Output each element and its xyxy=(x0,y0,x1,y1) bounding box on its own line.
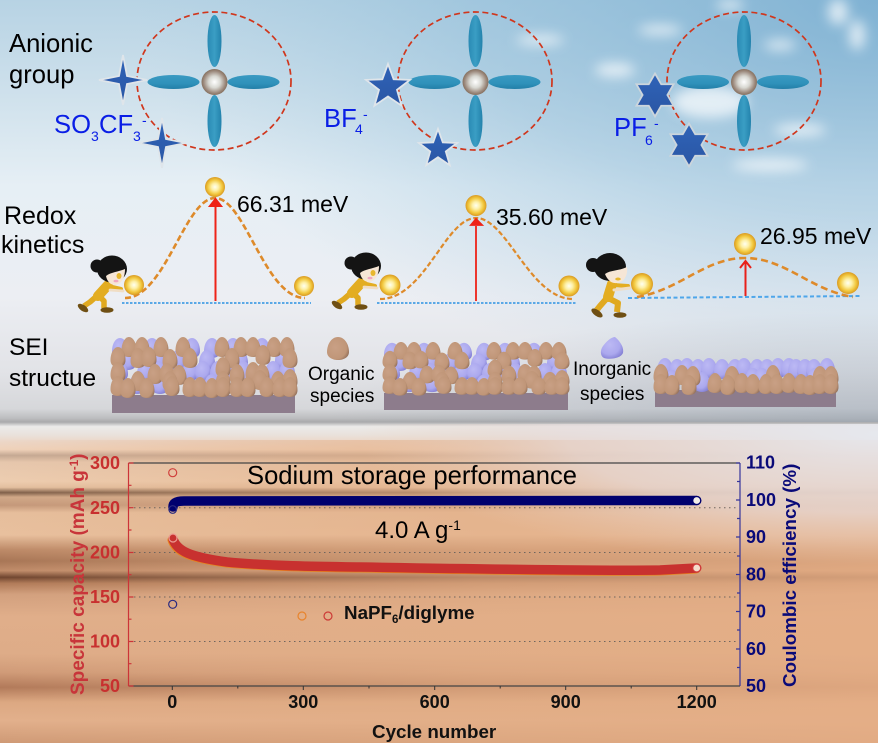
row label: Anionic group: group xyxy=(9,61,74,89)
icon: five-point star xyxy=(419,129,457,165)
solvation shell circle xyxy=(137,12,291,150)
legend: organic species xyxy=(308,337,375,407)
baseline xyxy=(628,296,862,298)
icon: four-point star xyxy=(138,118,186,168)
right axis tick labels: 60 xyxy=(746,639,766,659)
label: BF4: - xyxy=(363,106,368,122)
label: SO3CF3: SO xyxy=(54,111,91,139)
value label: 35.60 meV xyxy=(496,204,608,230)
left axis title: Specific capacity (mAh g xyxy=(68,470,89,695)
SEI layer 2 xyxy=(382,342,570,410)
left axis xyxy=(128,463,134,686)
legend: inorganic species: species xyxy=(580,384,644,405)
series: coulombic efficiency xyxy=(169,496,701,608)
right axis tick labels: 90 xyxy=(746,527,766,547)
legend: electrolyte: 6 xyxy=(392,614,398,626)
row label: Redox kinetics: Redox xyxy=(4,202,77,230)
chart title: Sodium storage performance xyxy=(247,462,577,490)
panel: BF4 anion xyxy=(324,12,552,165)
icon: six-point star xyxy=(670,124,708,166)
label: BF4: 4 xyxy=(355,121,363,137)
icon: left ball xyxy=(380,274,400,296)
right axis xyxy=(736,463,740,686)
left axis tick labels: 150 xyxy=(90,587,120,607)
icon: right ball xyxy=(294,276,314,296)
energy barrier 2 xyxy=(330,195,608,311)
series: capacity xyxy=(169,469,701,572)
legend: organic species: species xyxy=(310,386,374,407)
arrow: barrier height xyxy=(471,219,482,301)
legend: organic species: Organic xyxy=(308,364,375,385)
x axis ticks xyxy=(172,686,697,690)
right axis tick labels: 110 xyxy=(746,452,775,472)
SEI layer 3 xyxy=(654,358,838,407)
right axis tick labels: 100 xyxy=(746,490,776,510)
row label: SEI structure: SEI xyxy=(9,334,48,361)
energy barrier 1 xyxy=(76,177,349,314)
row label: SEI structure: structue xyxy=(9,365,96,392)
panel: PF6 anion xyxy=(614,12,821,166)
icon: top ball xyxy=(205,177,225,197)
x axis tick labels xyxy=(167,692,717,712)
left axis title: -1 xyxy=(69,459,81,470)
icon: right ball xyxy=(837,272,859,294)
icon: five-point star xyxy=(366,64,410,106)
icon: left ball xyxy=(124,275,144,295)
icon: left ball xyxy=(631,273,653,295)
label: PF6: PF xyxy=(614,114,647,142)
SEI layer 1 xyxy=(110,337,298,413)
solvation shell circle xyxy=(667,12,821,150)
label: SO3CF3: 3 xyxy=(133,128,141,144)
right axis tick labels: 70 xyxy=(746,602,766,622)
left axis tick labels xyxy=(90,453,120,696)
right axis title: Coulombic efficiency (%) xyxy=(779,464,800,687)
x axis tick labels: 900 xyxy=(551,692,581,712)
x axis tick labels: 600 xyxy=(420,692,450,712)
arrow: barrier height xyxy=(210,199,221,301)
x axis tick labels: 1200 xyxy=(677,692,717,712)
chart: sodium storage performance xyxy=(68,452,800,742)
left axis tick labels: 300 xyxy=(90,453,120,473)
sodium ion with solvent petals xyxy=(148,15,280,147)
top and bottom spines xyxy=(128,463,740,686)
barrier curve xyxy=(637,258,853,297)
label: PF6: 6 xyxy=(645,132,653,148)
icon: six-point star xyxy=(636,74,674,116)
value label: 26.95 meV xyxy=(760,223,872,249)
label: SO3CF3: CF xyxy=(99,111,133,139)
panel: SO3CF3 anion xyxy=(54,12,291,168)
label: BF4: BF xyxy=(324,105,357,133)
value label: 66.31 meV xyxy=(237,191,349,217)
icon: four-point star xyxy=(99,55,147,105)
legend: inorganic species: Inorganic xyxy=(573,359,651,380)
x axis title: Cycle number xyxy=(372,721,497,742)
icon: girl pushing ball xyxy=(330,252,381,311)
icon: top ball xyxy=(466,195,486,216)
solvation shell circle xyxy=(398,12,552,150)
label: PF6: - xyxy=(654,115,659,131)
legend: inorganic species xyxy=(573,337,651,405)
left axis tick labels: 200 xyxy=(90,542,120,562)
x axis tick labels: 0 xyxy=(167,692,177,712)
left axis tick labels: 100 xyxy=(90,632,120,652)
label: SO3CF3: - xyxy=(142,112,147,128)
row label: Anionic group: Anionic xyxy=(9,30,93,58)
right axis tick labels xyxy=(746,452,776,696)
right axis tick labels: 50 xyxy=(746,676,766,696)
current density label: -1 xyxy=(448,517,461,533)
baseline xyxy=(122,302,311,304)
energy barrier 3 xyxy=(586,223,872,319)
barrier curve xyxy=(125,198,305,298)
grid lines xyxy=(129,508,738,642)
icon: girl pushing ball xyxy=(586,253,630,319)
current density label: 4.0 A g xyxy=(375,517,448,544)
arrow: barrier height xyxy=(740,261,751,296)
label: SO3CF3: 3 xyxy=(91,128,99,144)
left axis title: ) xyxy=(68,454,89,460)
legend: electrolyte xyxy=(298,602,475,626)
legend: electrolyte: /diglyme xyxy=(398,602,475,623)
icon: top ball xyxy=(734,233,756,255)
icon: girl pushing ball xyxy=(76,256,127,314)
legend: electrolyte: NaPF xyxy=(344,602,392,623)
left axis tick labels: 50 xyxy=(100,676,120,696)
right axis tick labels: 80 xyxy=(746,564,766,584)
left axis tick labels: 250 xyxy=(90,498,120,518)
barrier curve xyxy=(380,218,573,299)
x axis tick labels: 300 xyxy=(288,692,318,712)
icon: right ball xyxy=(558,276,580,296)
baseline xyxy=(377,302,576,304)
sodium ion with solvent petals xyxy=(677,15,809,147)
row label: Redox kinetics: kinetics xyxy=(1,231,84,259)
sodium ion with solvent petals xyxy=(408,15,540,147)
